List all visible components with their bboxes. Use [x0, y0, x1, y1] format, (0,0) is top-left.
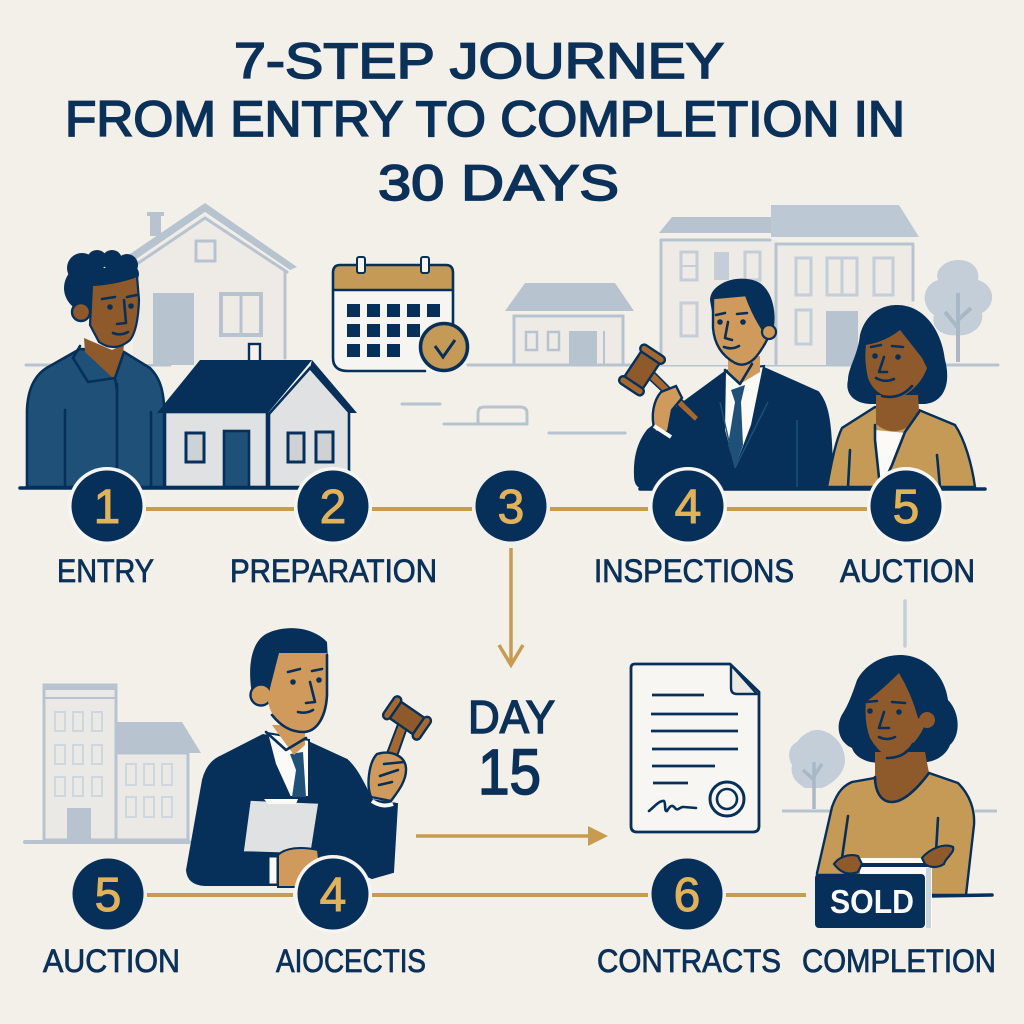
- step 6: [652, 858, 722, 930]
- ground line: top: [20, 488, 985, 489]
- step 1: 1: [94, 481, 120, 534]
- decorative ground sketch: [402, 404, 625, 433]
- background buildings: bottom left: [23, 685, 201, 844]
- person: auctioneer with gavel (top): [618, 279, 832, 488]
- step 5: 5: [893, 481, 919, 534]
- labels: bottom row: COMPLETION: [802, 943, 996, 979]
- day 15 callout: 15: [478, 736, 541, 808]
- icon: calendar: [332, 257, 468, 372]
- labels: bottom row: [43, 943, 996, 979]
- person: woman (top): [827, 305, 975, 487]
- icon: contract document: [631, 664, 759, 832]
- title: FROM ENTRY TO COMPLETION IN: [65, 91, 905, 147]
- sold sign: SOLD: [830, 883, 914, 920]
- background buildings: top right: [468, 205, 998, 365]
- step 4 (bottom): 4: [320, 869, 346, 922]
- person: entry client: [27, 250, 164, 487]
- title: 7-STEP JOURNEY: [234, 33, 724, 89]
- step 3: 3: [498, 481, 524, 534]
- labels: top row: PREPARATION: [230, 553, 437, 589]
- step connectors: top row: [146, 507, 867, 511]
- background house: top left: [26, 203, 297, 365]
- background tree: top right: [925, 260, 992, 362]
- sold sign: [815, 874, 925, 928]
- labels: top row: AUCTION: [840, 553, 975, 589]
- step 4 (bottom): [294, 855, 372, 933]
- title: [65, 33, 905, 211]
- step 5: [867, 467, 945, 545]
- labels: bottom row: CONTRACTS: [597, 943, 781, 979]
- step 4: 4: [675, 481, 701, 534]
- step 1: [68, 467, 146, 545]
- step 4: [649, 467, 727, 545]
- person: woman with sold sign: [817, 655, 992, 928]
- person: auctioneer with clipboard (bottom): [187, 628, 432, 887]
- step 5 (bottom): 5: [95, 869, 121, 922]
- labels: bottom row: AIOCECTIS: [276, 943, 426, 979]
- background house: small middle: [505, 283, 634, 365]
- labels: top row: ENTRY: [57, 553, 154, 589]
- background tree: bottom right: [782, 730, 997, 811]
- step 3: [476, 470, 546, 542]
- step 5 (bottom): [72, 858, 144, 930]
- labels: top row: [57, 553, 975, 589]
- labels: bottom row: AUCTION: [43, 943, 180, 979]
- step 6: 6: [674, 869, 700, 922]
- arrow: right to contract: [416, 826, 608, 846]
- arrow: down to day 15: [499, 548, 523, 665]
- labels: top row: INSPECTIONS: [594, 553, 794, 589]
- step 2: 2: [320, 481, 346, 534]
- step connectors: bottom row: [147, 893, 806, 897]
- title: 30 DAYS: [378, 155, 619, 211]
- day 15 callout: DAY: [468, 691, 555, 743]
- day 15 callout: [468, 691, 555, 808]
- faint divider tick: [903, 601, 907, 646]
- house: preparation: [157, 344, 357, 487]
- step 2: [294, 467, 372, 545]
